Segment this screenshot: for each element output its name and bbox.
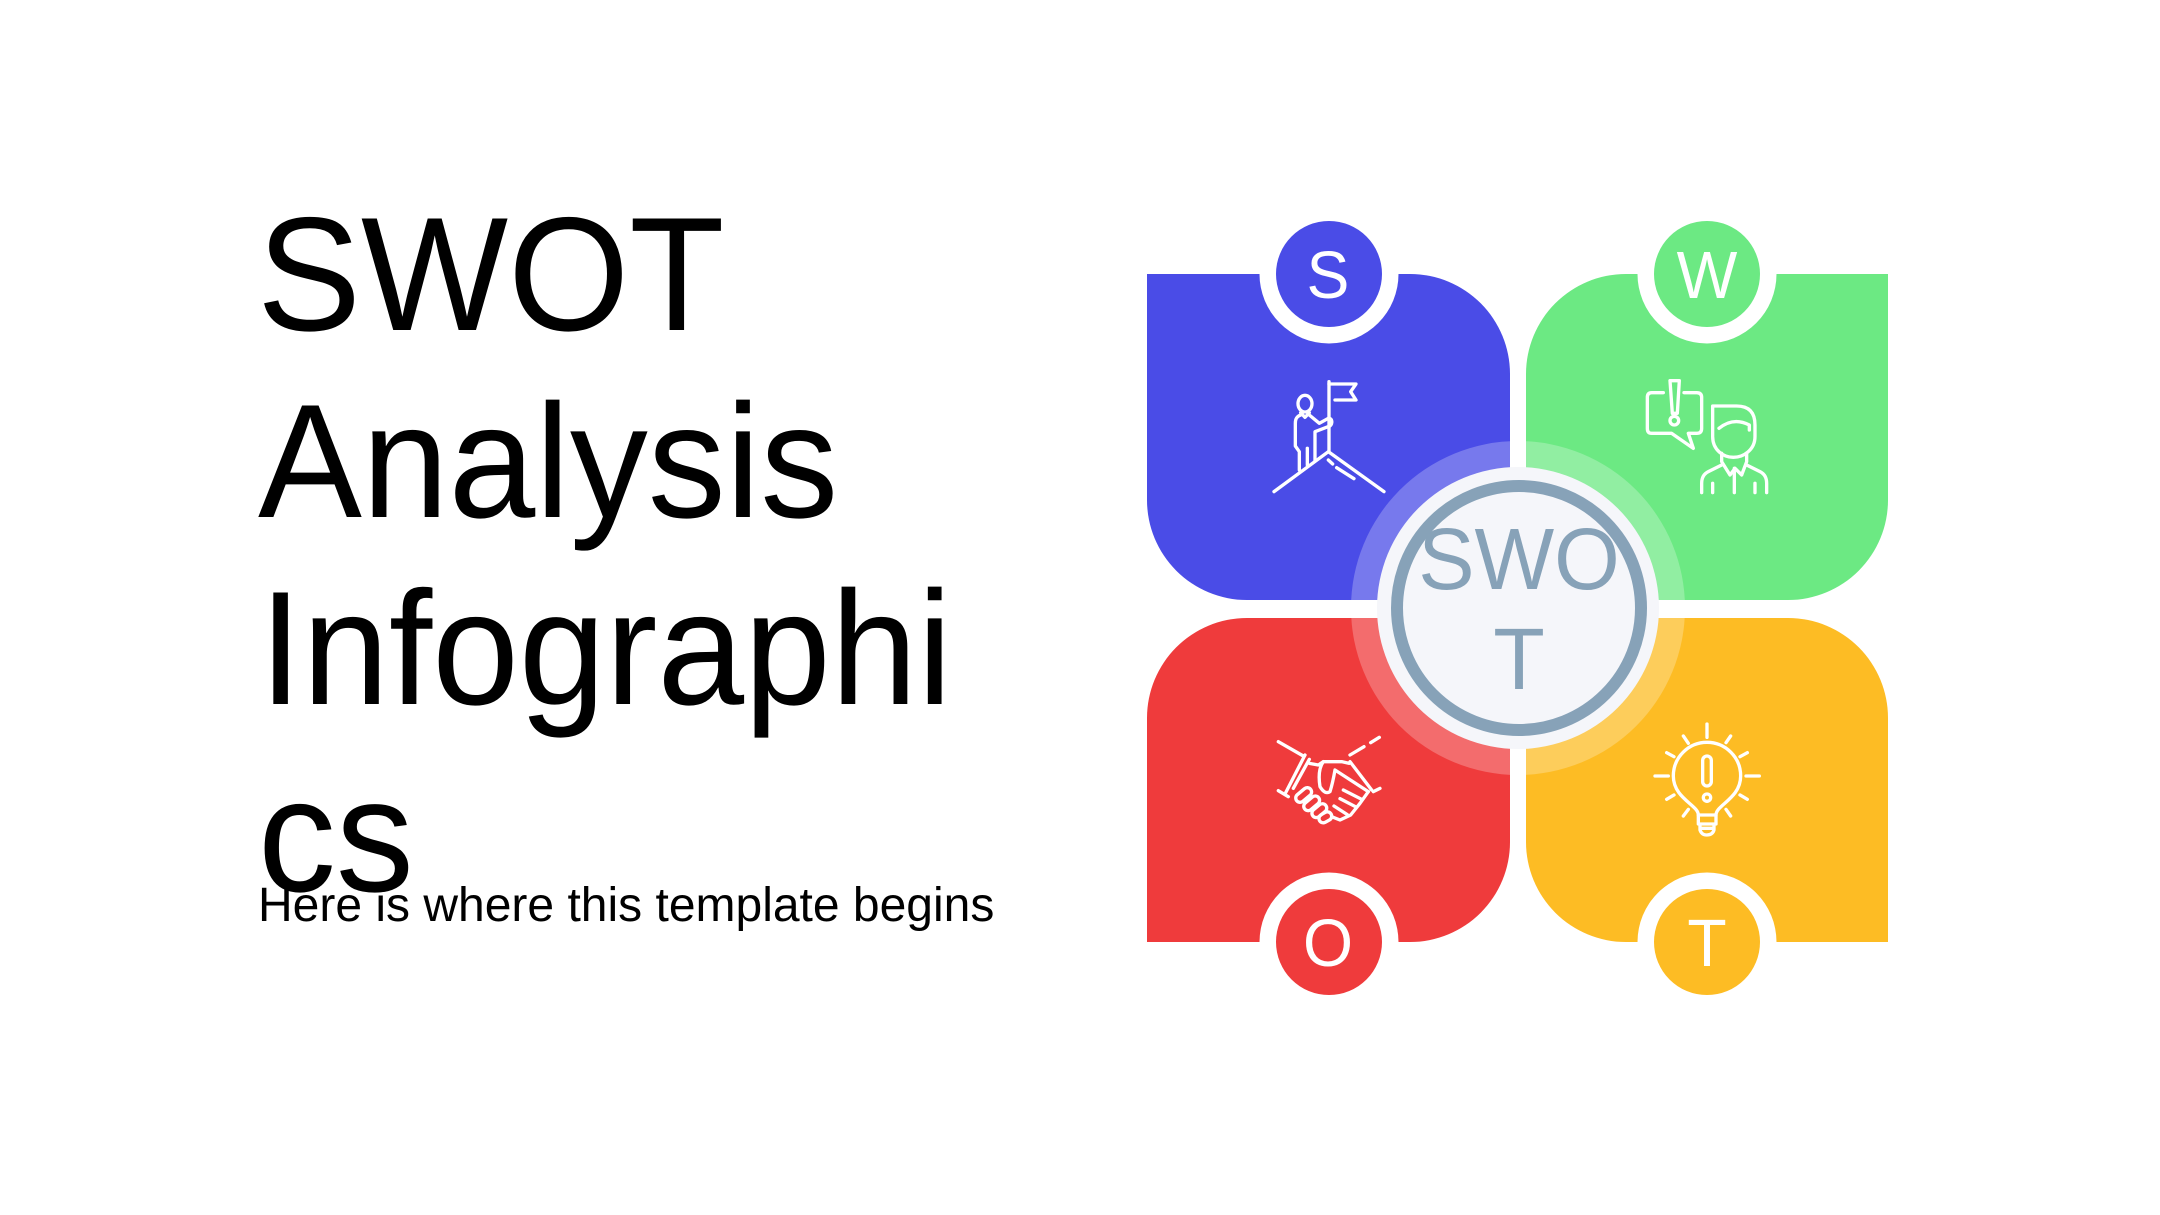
badge: W: W: [1677, 238, 1737, 312]
center hub: SWOT: SWO: [1418, 511, 1620, 608]
title: cs: [258, 744, 414, 926]
badge: S: [1260, 204, 1398, 344]
title: [257, 183, 952, 926]
title: Analysis: [258, 370, 838, 552]
subtitle: Here is where this template begins: [258, 879, 994, 932]
panel: weaknesses: [1526, 274, 1888, 600]
center hub: SWOT: T: [1493, 611, 1545, 708]
panel: threats: [1526, 618, 1888, 942]
icon: person with flag on a summit: [1274, 382, 1384, 492]
center hub: SWOT: [1351, 441, 1685, 775]
icon: handshake: [1278, 737, 1380, 824]
panel: opportunities: [1147, 618, 1510, 942]
badge: S: S: [1307, 238, 1349, 312]
badge: W: [1638, 204, 1776, 344]
panel: strengths: [1147, 274, 1510, 600]
title: SWOT: [257, 183, 724, 365]
badge: T: T: [1687, 906, 1727, 980]
badge: O: O: [1303, 906, 1353, 980]
icon: person with alert speech bubble: [1647, 381, 1767, 493]
title: Infographi: [259, 557, 952, 739]
badge: O: [1260, 872, 1398, 1012]
icon: light bulb with exclamation mark: [1655, 724, 1759, 835]
badge: T: [1638, 872, 1776, 1012]
